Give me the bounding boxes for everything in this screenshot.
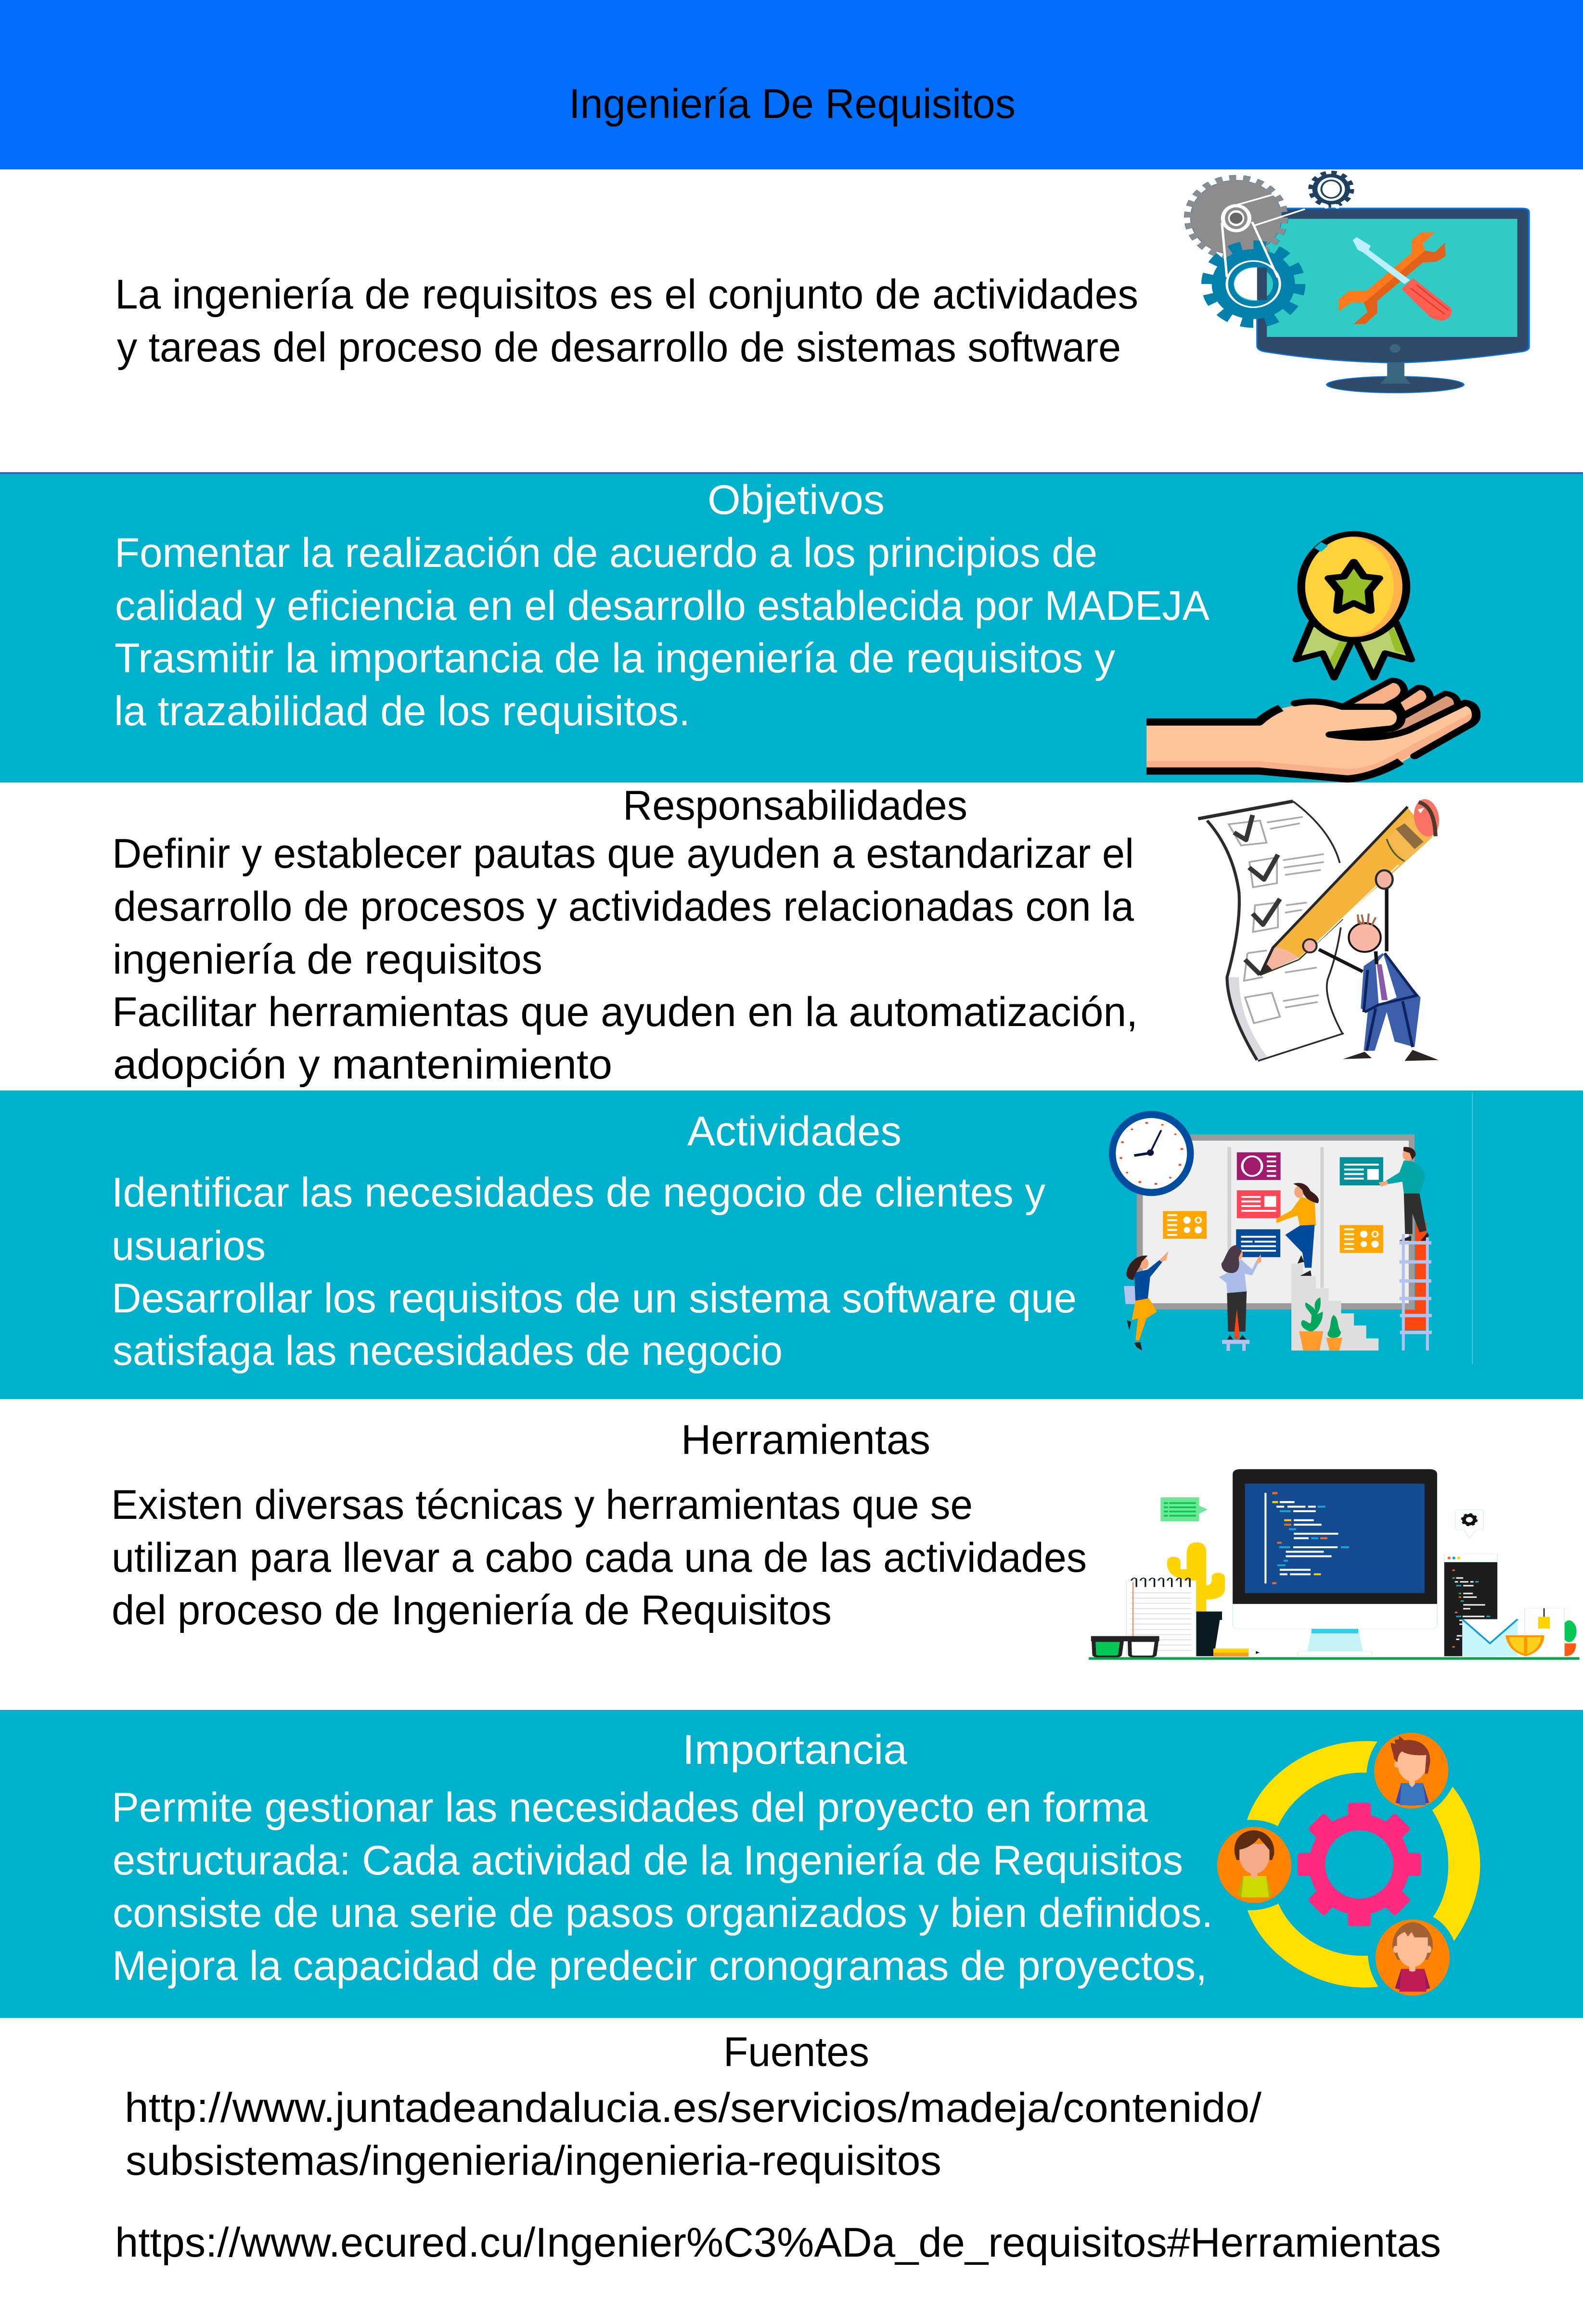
text block: source links: https://www.ecured.cu/Ingenier%C3%ADa_de_requisitos#Herramientas xyxy=(115,2220,1441,2266)
text block: definition: La ingeniería de requisitos es el conjunto de actividades xyxy=(115,271,1138,318)
person: left xyxy=(1217,1827,1291,1903)
heading: responsabilidades: Responsabilidades xyxy=(623,783,967,829)
text block: importancia: Mejora la capacidad de predecir cronogramas de proyectos, xyxy=(112,1943,1207,1989)
panel: herramientas xyxy=(111,1417,1580,1660)
cards xyxy=(1163,1152,1383,1257)
text block: actividades: Desarrollar los requisitos de un sistema software que xyxy=(112,1275,1077,1322)
person: teal shirt on ladder xyxy=(1378,1147,1429,1241)
text block: objetivos: calidad y eficiencia en el desarrollo establecida por MADEJA xyxy=(115,583,1210,629)
man xyxy=(1303,870,1439,1061)
pink gear xyxy=(1298,1803,1421,1926)
panel: responsabilidades xyxy=(112,783,1441,1088)
green chat bubble xyxy=(1160,1497,1208,1521)
text block: actividades: satisfaga las necesidades de negocio xyxy=(113,1328,783,1374)
icon: team at planning board xyxy=(1109,1111,1432,1351)
title banner xyxy=(0,0,1583,169)
text block: objetivos xyxy=(114,530,1210,734)
icon: desk with computer and code xyxy=(1089,1469,1580,1660)
text block: actividades: Identificar las necesidades de negocio de clientes y xyxy=(112,1169,1045,1216)
panel: definition xyxy=(115,173,1530,393)
gray gear xyxy=(1189,179,1284,257)
text block: source links: http://www.juntadeandalucia.es/servicios/madeja/contenido/ xyxy=(125,2085,1261,2131)
person: yellow top on stairs xyxy=(1276,1183,1319,1276)
medal xyxy=(1300,534,1406,640)
panel: fuentes xyxy=(115,2029,1441,2266)
blue gear xyxy=(1208,245,1299,322)
icon: man with pencil and checklist xyxy=(1198,797,1441,1062)
hand xyxy=(1146,681,1476,779)
heading: fuentes: Fuentes xyxy=(723,2029,869,2075)
ladder xyxy=(1400,1234,1432,1350)
title: Ingeniería De Requisitos xyxy=(569,81,1016,127)
mail and mug xyxy=(1462,1608,1579,1656)
text block: source links xyxy=(115,2085,1441,2266)
icon: team around gear xyxy=(1217,1733,1480,1996)
text block: objetivos: Trasmitir la importancia de la ingeniería de requisitos y xyxy=(115,635,1115,681)
text block: responsabilidades: adopción y mantenimiento xyxy=(113,1041,612,1088)
clock xyxy=(1109,1111,1194,1196)
cactus and pot xyxy=(1167,1542,1225,1656)
text block: responsabilidades: Definir y establecer pautas que ayuden a estandarizar el xyxy=(112,831,1134,877)
screwdriver xyxy=(1353,237,1452,321)
heading: actividades: Actividades xyxy=(687,1108,901,1155)
text block: importancia: estructurada: Cada actividad de la Ingeniería de Requisitos xyxy=(113,1837,1183,1884)
person: lavender top on stool xyxy=(1219,1245,1261,1351)
text block: responsabilidades xyxy=(112,831,1138,1088)
monitor xyxy=(1233,1469,1437,1656)
text block: herramientas xyxy=(111,1482,1087,1633)
text block: responsabilidades: Facilitar herramientas que ayuden en la automatización, xyxy=(112,989,1138,1035)
code on screen xyxy=(1264,1492,1349,1584)
text block: importancia: Permite gestionar las necesidades del proyecto en forma xyxy=(112,1785,1148,1831)
text block: responsabilidades: ingeniería de requisitos xyxy=(113,937,542,983)
person: blue top with bag xyxy=(1124,1251,1169,1350)
icon: hand holding medal xyxy=(1146,534,1476,779)
notepad xyxy=(1126,1578,1196,1656)
text block: actividades xyxy=(112,1169,1077,1374)
icon: monitor with gears and tools xyxy=(1189,173,1530,393)
person: top right xyxy=(1374,1733,1448,1809)
code window xyxy=(1444,1554,1497,1656)
text block: actividades: usuarios xyxy=(112,1223,266,1269)
board xyxy=(1137,1134,1427,1339)
stairs and plants xyxy=(1291,1264,1378,1350)
text block: herramientas: del proceso de Ingeniería de Requisitos xyxy=(112,1587,832,1633)
checklist paper xyxy=(1198,801,1344,1062)
person: bottom right xyxy=(1376,1919,1450,1996)
text block: definition: y tareas del proceso de desarrollo de sistemas software xyxy=(117,324,1121,371)
panel: importancia xyxy=(0,1710,1583,2018)
heading: herramientas: Herramientas xyxy=(681,1417,930,1463)
pencil xyxy=(1260,797,1441,976)
text block: herramientas: Existen diversas técnicas y herramientas que se xyxy=(111,1482,973,1528)
text block: definition xyxy=(115,271,1138,371)
pencil xyxy=(1213,1648,1260,1656)
text block: objetivos: Fomentar la realización de acuerdo a los principios de xyxy=(115,530,1097,576)
text block: importancia xyxy=(112,1785,1213,1989)
heading: importancia: Importancia xyxy=(682,1727,907,1773)
wrench xyxy=(1339,232,1446,324)
ribbons xyxy=(1296,623,1412,678)
panel: objetivos xyxy=(0,472,1583,783)
panel: actividades xyxy=(0,1091,1583,1399)
gear bubble xyxy=(1455,1509,1483,1538)
text block: herramientas: utilizan para llevar a cabo cada una de las actividades xyxy=(112,1535,1087,1581)
small gear xyxy=(1311,173,1351,205)
heading: objetivos: Objetivos xyxy=(708,477,885,523)
text block: objetivos: la trazabilidad de los requisitos. xyxy=(114,688,690,734)
text block: importancia: consiste de una serie de pasos organizados y bien definidos. xyxy=(113,1890,1213,1936)
glasses xyxy=(1091,1636,1159,1656)
text block: responsabilidades: desarrollo de procesos y actividades relacionadas con la xyxy=(114,884,1134,930)
text block: source links: subsistemas/ingenieria/ingenieria-requisitos xyxy=(126,2138,941,2184)
yellow ring xyxy=(1247,1741,1480,1988)
